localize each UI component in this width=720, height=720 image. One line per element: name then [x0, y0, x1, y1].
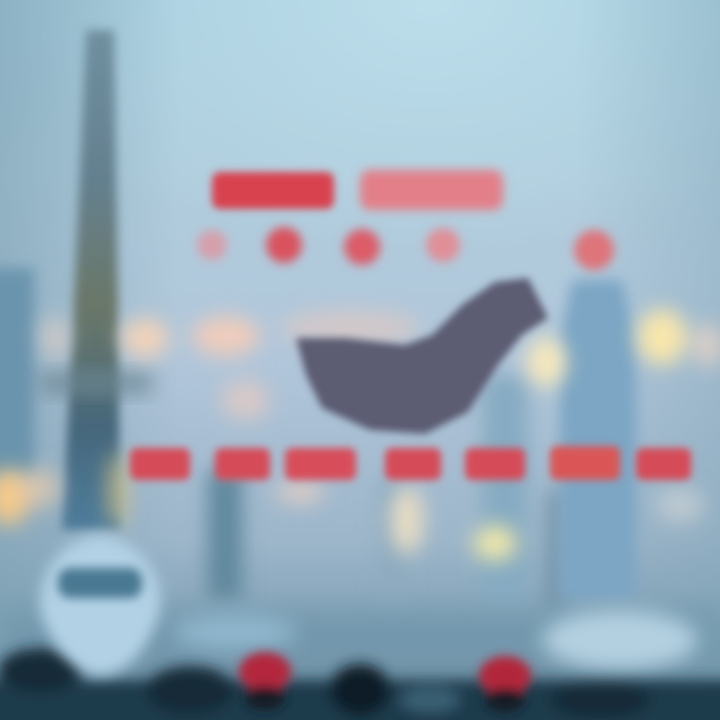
row of red icons	[197, 227, 614, 270]
left background building	[0, 268, 34, 478]
airplane cockpit window	[58, 568, 142, 598]
right tower	[560, 280, 636, 600]
lower haze band	[0, 615, 720, 655]
dark bird silhouette	[296, 278, 548, 434]
title: right word	[360, 170, 503, 210]
red banner row	[130, 446, 691, 480]
center-left plane body	[173, 614, 297, 650]
dark foreground ground	[0, 648, 720, 720]
red tail light left	[239, 652, 291, 710]
bokeh lights	[0, 309, 720, 561]
mid background buildings	[208, 375, 564, 610]
title: left word	[212, 172, 334, 209]
airplane nose	[40, 535, 161, 675]
red tail light right	[479, 656, 531, 712]
right plane body	[542, 610, 698, 670]
left tower	[62, 30, 120, 530]
tower crossbar	[40, 372, 152, 394]
